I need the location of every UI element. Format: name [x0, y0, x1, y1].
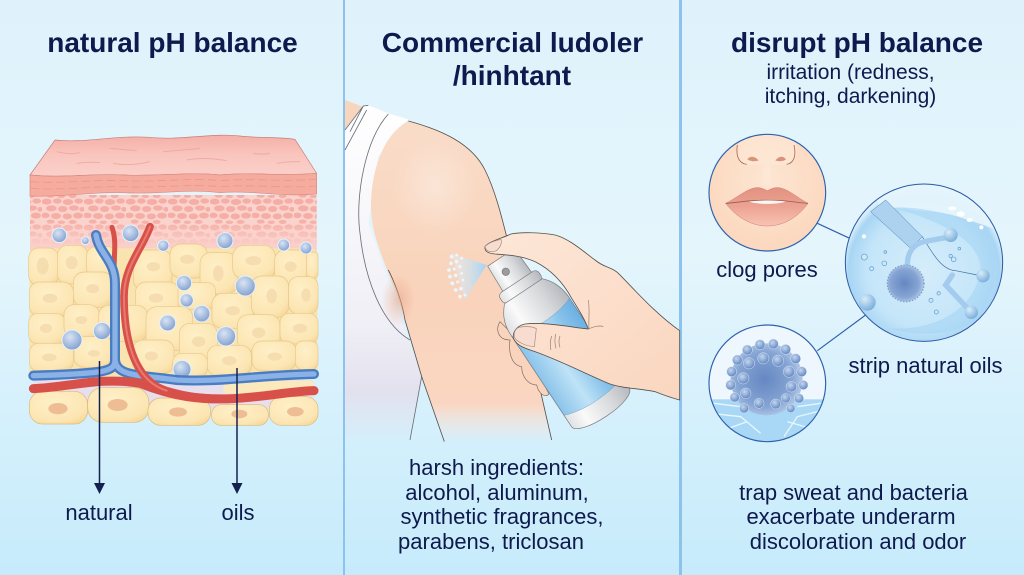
- red vessels: [33, 381, 314, 399]
- fat cells: [29, 244, 318, 377]
- subheading: irritation: itching, darkening): [765, 85, 936, 108]
- skin surface top: [30, 135, 317, 176]
- fat layer base: [29, 248, 317, 377]
- panel divider right: [679, 0, 682, 575]
- blue vessel: [33, 235, 314, 381]
- armpit shading: [382, 273, 415, 327]
- subheading: irritation: [765, 61, 936, 108]
- label: clog pores: clog pores: [716, 257, 818, 282]
- text: trap sweat: exacerbate underarm: [746, 504, 956, 529]
- text: trap sweat: trap sweat and bacteria: [739, 480, 969, 505]
- label: strip natural oils: strip natural oils: [848, 353, 1003, 378]
- dermis lower fade: [30, 220, 317, 253]
- panel: natural pH balance: [29, 27, 318, 525]
- text: trap sweat: discoloration and odor: [750, 529, 966, 554]
- arrow: natural: [94, 361, 105, 494]
- heading: disrupt pH balance: disrupt pH balance: [731, 27, 983, 58]
- illustration group: circles: [707, 134, 1004, 443]
- shoulder skin: [345, 100, 362, 129]
- circle: bacteria on skin: [707, 325, 827, 443]
- tank top: [345, 105, 422, 443]
- text: harsh ingredients: synthetic fragrances,: [401, 504, 603, 529]
- skin layer: dermis cells: [30, 195, 317, 252]
- heading: Commercial ludoler /hinhtant: Commercial ludoler: [382, 27, 643, 58]
- arrow: oils: [232, 368, 242, 494]
- panel: disrupt pH balance: [707, 27, 1004, 554]
- text: harsh ingredients: alcohol, aluminum,: [405, 480, 589, 505]
- heading: Commercial ludoler /hinhtant: [382, 27, 643, 91]
- circle: lips: [709, 134, 826, 251]
- circle: water molecule: [845, 180, 1004, 341]
- panel: commercial deodorant: [345, 27, 680, 554]
- thumbnail: [514, 327, 536, 347]
- hand: [485, 233, 680, 400]
- illustration: skin cross-section: [29, 135, 318, 425]
- text: harsh ingredients: parabens, triclosan: [398, 529, 584, 554]
- text: harsh ingredients: [398, 455, 603, 554]
- lavender strip under vessels: [33, 380, 313, 410]
- text: trap sweat: [739, 480, 969, 554]
- arm highlight: [392, 137, 478, 237]
- fat cell nuclei: [37, 255, 311, 365]
- bubbles: [52, 225, 312, 378]
- arm: [371, 121, 552, 443]
- panel divider left: [343, 0, 345, 575]
- text: harsh ingredients: harsh ingredients:: [409, 455, 584, 480]
- heading: Commercial ludoler /hinhtant: /hinhtant: [453, 60, 571, 91]
- subheading: irritation: irritation (redness,: [766, 61, 935, 84]
- spray can: [472, 238, 635, 435]
- label: oils: oils: [221, 500, 255, 525]
- connector lines: [817, 223, 866, 351]
- label: natural: natural: [65, 500, 133, 525]
- index fingernail: [485, 239, 501, 252]
- illustration: arm and spray can: [345, 100, 680, 443]
- bottom fat cells: [29, 388, 318, 425]
- heading: natural pH balance: natural pH balance: [47, 27, 298, 58]
- spray mist: [447, 253, 487, 300]
- skin layer: epidermis band: [30, 173, 317, 196]
- cream cells between vessels: [223, 381, 313, 393]
- red vessel branch back: [112, 227, 115, 270]
- lips: [726, 188, 808, 226]
- fingers behind can: [498, 322, 549, 396]
